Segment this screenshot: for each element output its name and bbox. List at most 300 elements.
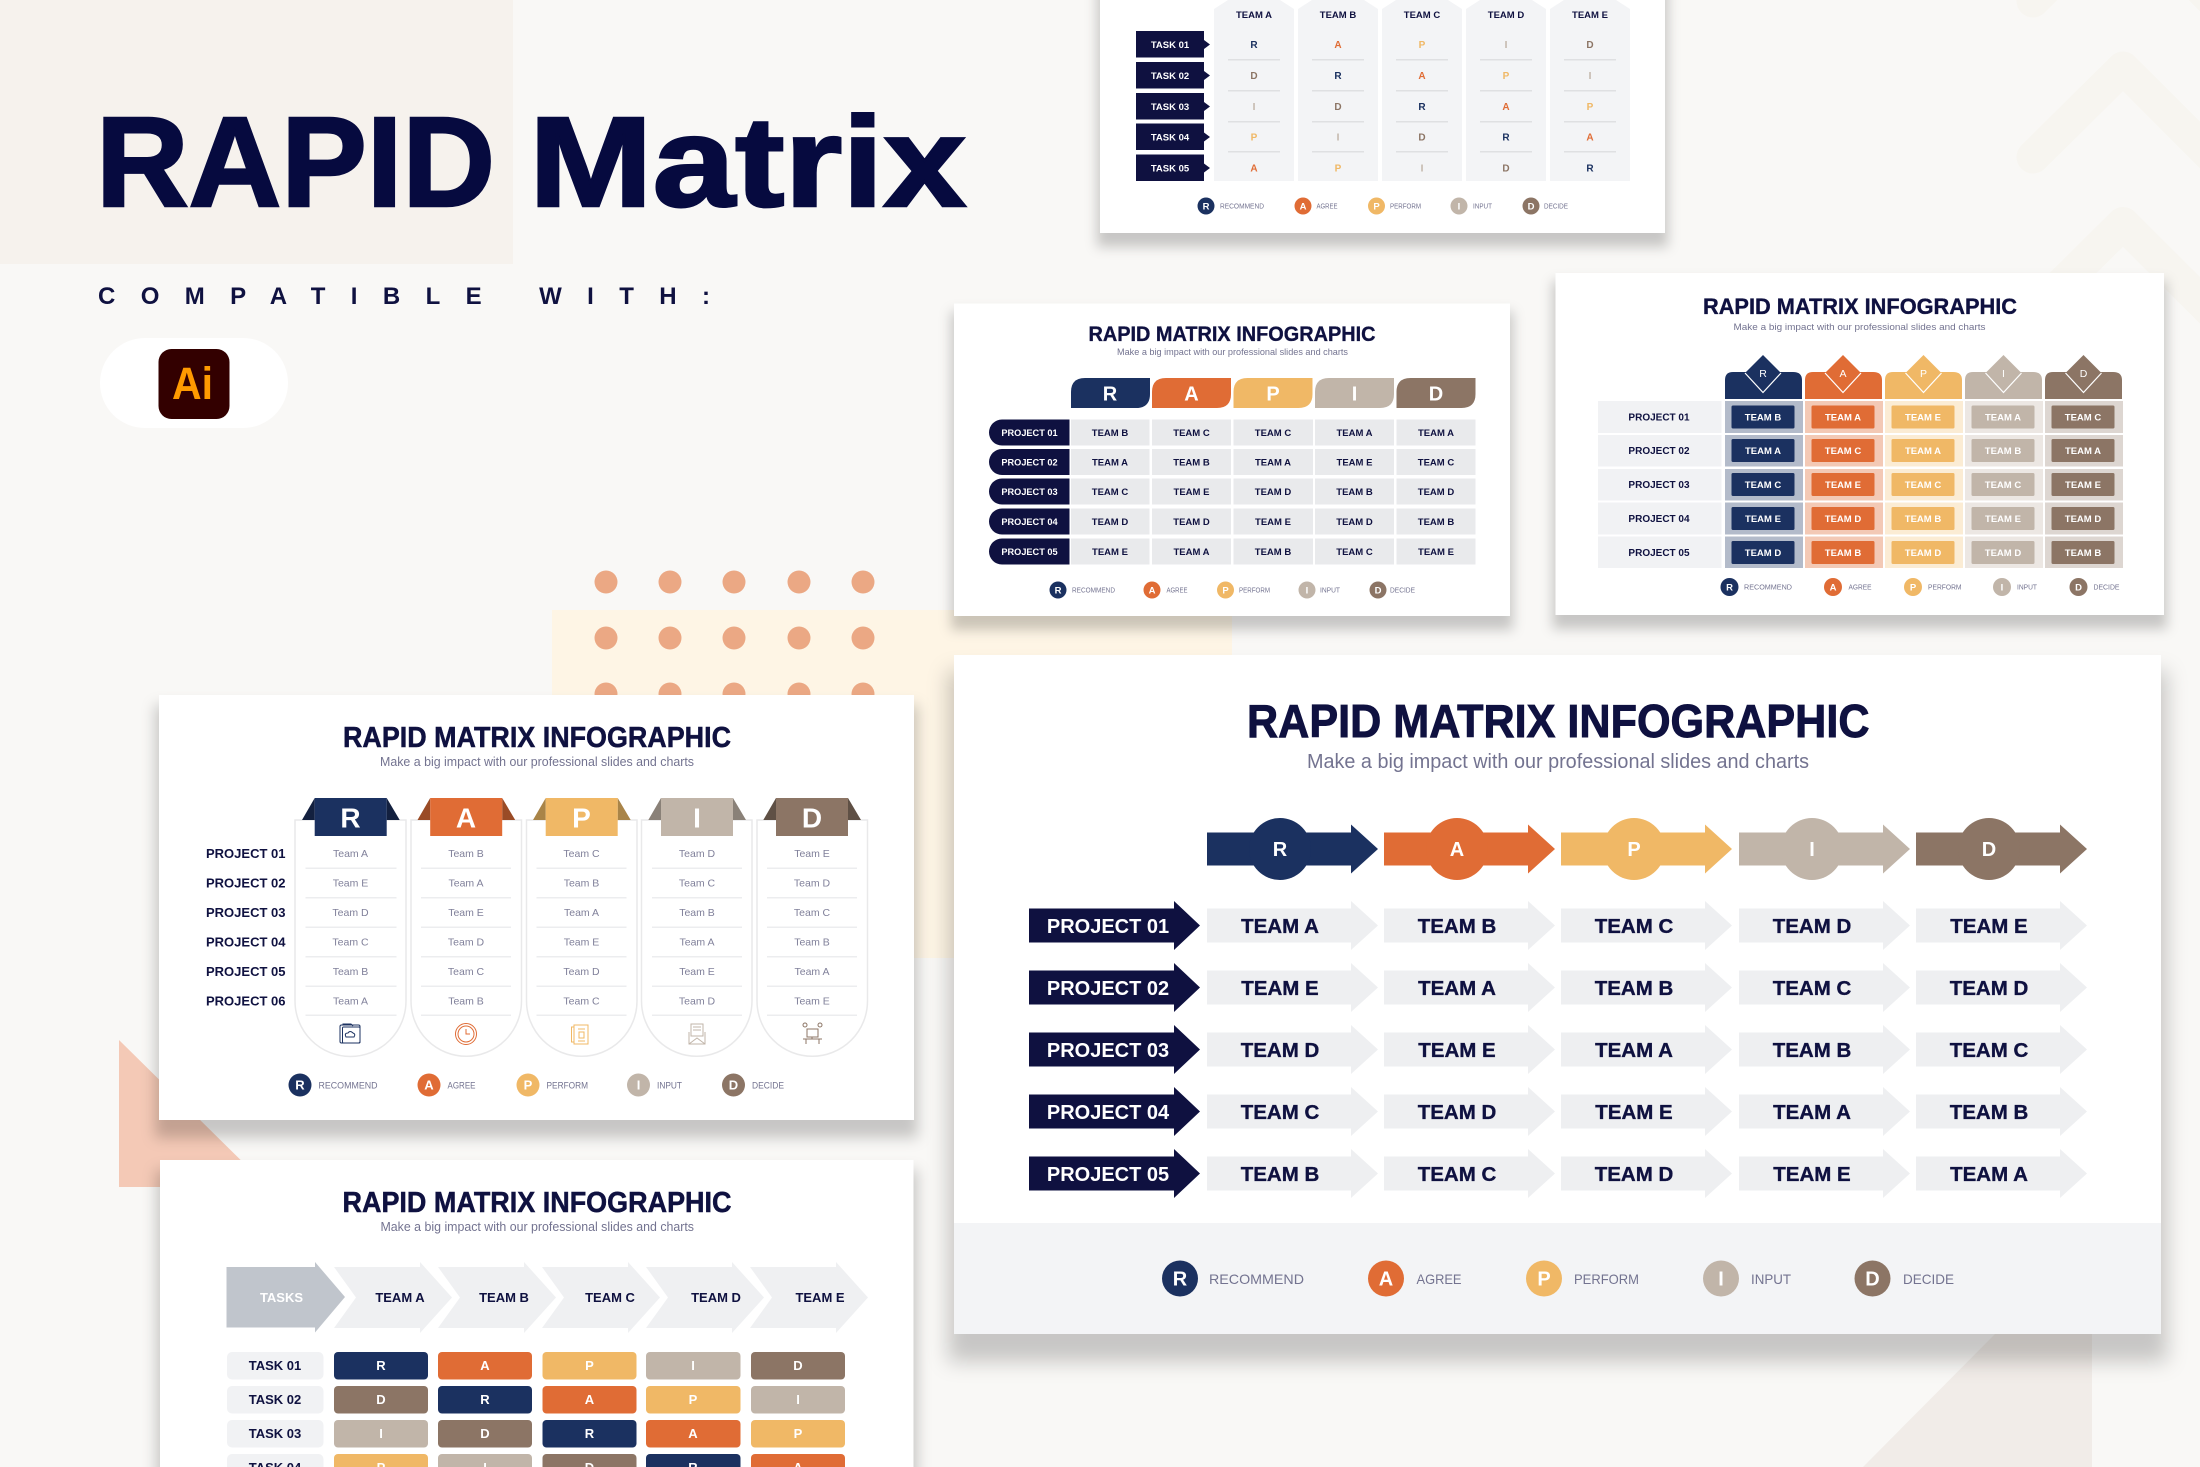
team chip labels: TEAM E	[1905, 412, 1941, 424]
team cell labels: TEAM C	[1173, 428, 1210, 439]
team names: Team B	[333, 966, 368, 978]
team arrow labels: TEAM E	[1241, 977, 1319, 1000]
task labels: TASK 02	[249, 1392, 301, 1407]
team cell labels: TEAM E	[1337, 458, 1372, 468]
team header arrows: TEAM B	[479, 1290, 529, 1305]
legend	[1162, 1260, 1954, 1296]
project labels: PROJECT 02	[206, 876, 285, 890]
legend: RECOMMEND	[1220, 204, 1264, 210]
team arrow labels: TEAM A	[1241, 915, 1319, 938]
legend	[1050, 582, 1415, 598]
legend: A	[1830, 582, 1837, 594]
project labels	[206, 846, 286, 1008]
column heads: TEAM C	[1404, 10, 1440, 21]
RAPID cell grid	[334, 1352, 845, 1467]
RAPID cell grid: A	[585, 1392, 595, 1407]
project labels: PROJECT 04	[206, 934, 286, 950]
team cell labels: TEAM B	[1336, 487, 1373, 498]
task tag labels	[1151, 40, 1190, 174]
task tag labels: TASK 02	[1151, 71, 1189, 82]
team chip labels: TEAM D	[1745, 548, 1781, 559]
diamond column headers	[1725, 355, 2122, 399]
team names: Team C	[332, 936, 369, 948]
legend: R	[1055, 586, 1062, 596]
team chip labels: TEAM C	[1985, 480, 2021, 491]
team columns	[1214, 0, 1630, 181]
legend: AGREE	[1848, 584, 1872, 592]
team cell labels: TEAM E	[1418, 547, 1454, 558]
team cell labels: TEAM A	[1336, 428, 1373, 439]
letter grid: A	[1250, 164, 1258, 174]
team cell labels: TEAM B	[1255, 547, 1291, 558]
team cell labels: TEAM A	[1173, 547, 1210, 558]
RAPID cell grid: P	[585, 1358, 594, 1373]
project labels: PROJECT 06	[206, 994, 285, 1008]
panel: arrow matrix slide	[954, 655, 2161, 1334]
RAPID arrow headers: A	[1450, 839, 1464, 861]
RAPID arrow headers: I	[1809, 839, 1815, 861]
team arrow labels: TEAM C	[1418, 1163, 1496, 1186]
team names: Team B	[564, 878, 599, 890]
diamond column headers: P	[1920, 368, 1927, 380]
team arrows	[1207, 901, 2087, 1198]
team names: Team A	[794, 966, 830, 978]
letter grid: A	[1502, 102, 1510, 113]
letter grid: P	[1251, 132, 1258, 144]
team chip labels: TEAM C	[2065, 412, 2101, 424]
legend: RECOMMEND	[318, 1080, 378, 1090]
column heads: TEAM D	[1488, 10, 1524, 21]
letter grid: D	[1250, 71, 1258, 82]
team names: Team E	[794, 848, 830, 860]
project arrow labels: PROJECT 04	[1047, 1102, 1170, 1124]
team chip labels: TEAM C	[1825, 446, 1861, 457]
tasks header arrow: TASKS	[260, 1290, 303, 1305]
legend: R	[295, 1078, 305, 1092]
project labels: PROJECT 01	[206, 846, 285, 861]
project row labels: PROJECT 05	[1628, 548, 1690, 559]
team chip labels: TEAM B	[1905, 514, 1941, 525]
legend: DECIDE	[1390, 588, 1415, 594]
project arrow labels: PROJECT 01	[1047, 916, 1169, 938]
team names: Team B	[448, 996, 484, 1008]
team arrow labels: TEAM E	[1950, 915, 2028, 938]
task tag labels: TASK 01	[1151, 40, 1190, 51]
slide subtitle: Make a big impact with our professional slides and charts	[1117, 347, 1348, 358]
team chip labels: TEAM D	[2065, 514, 2101, 525]
team cells	[1071, 420, 1476, 564]
team chip labels: TEAM A	[1825, 412, 1861, 424]
panel: capsule columns slide	[159, 695, 914, 1120]
legend: P	[1373, 202, 1380, 212]
team cell labels	[1092, 428, 1454, 558]
icon: Adobe Illustrator badge: Ai	[172, 358, 213, 409]
team names: Team A	[448, 878, 484, 890]
legend	[1198, 198, 1568, 214]
team cell labels: TEAM C	[1336, 547, 1373, 558]
RAPID leaf headers: I	[1352, 384, 1357, 406]
project pill labels: PROJECT 01	[1001, 428, 1058, 438]
background corner shape bottom right	[1863, 1300, 2092, 1467]
task tag labels: TASK 05	[1151, 164, 1190, 174]
legend: I	[2001, 582, 2003, 594]
team names: Team E	[794, 996, 830, 1008]
team cell labels: TEAM E	[1092, 547, 1128, 558]
background peach shape	[119, 1040, 268, 1187]
project arrow labels: PROJECT 02	[1047, 978, 1169, 1000]
team header arrows: TEAM C	[585, 1290, 636, 1305]
project row labels: PROJECT 03	[1628, 480, 1690, 491]
RAPID cell grid: I	[796, 1392, 800, 1407]
row dividers	[1228, 59, 1616, 152]
folded header tabs: R	[340, 802, 361, 834]
team chip labels	[1745, 412, 2101, 559]
project labels: PROJECT 03	[206, 905, 285, 920]
icon: desk	[803, 1023, 822, 1044]
RAPID leaf headers: D	[1429, 384, 1443, 406]
team cell labels: TEAM B	[1173, 458, 1210, 468]
team names: Team A	[564, 907, 599, 919]
RAPID cell grid: I	[691, 1358, 695, 1373]
legend: I	[1458, 202, 1460, 212]
team arrow labels: TEAM B	[1950, 1101, 2028, 1124]
team chip labels: TEAM A	[2065, 446, 2101, 457]
team names: Team C	[563, 996, 600, 1008]
team cell labels: TEAM D	[1092, 517, 1128, 528]
team chip labels: TEAM E	[1985, 514, 2021, 525]
team arrow labels: TEAM C	[1595, 915, 1673, 938]
team cell labels: TEAM A	[1092, 458, 1128, 468]
legend: AGREE	[1316, 204, 1338, 210]
legend: A	[1300, 202, 1307, 212]
legend: RECOMMEND	[1072, 588, 1115, 594]
RAPID cell grid: A	[688, 1426, 698, 1441]
slide title: RAPID MATRIX INFOGRAPHIC	[342, 1187, 732, 1219]
letter grid: I	[1589, 71, 1592, 82]
folded header tabs	[302, 798, 861, 836]
slide title: RAPID MATRIX INFOGRAPHIC	[1247, 695, 1870, 747]
diamond column headers: D	[2080, 368, 2088, 380]
legend: D	[1528, 202, 1535, 212]
folded header tabs: A	[456, 802, 476, 834]
letter grid: D	[1586, 40, 1594, 51]
letter grid: R	[1334, 71, 1342, 82]
team cell labels: TEAM E	[1255, 517, 1291, 528]
legend	[288, 1074, 784, 1096]
legend: P	[1910, 582, 1917, 594]
team chip labels: TEAM C	[1745, 480, 1781, 491]
team arrow labels: TEAM D	[1950, 977, 2028, 1000]
letter grid: D	[1418, 132, 1426, 144]
RAPID arrow headers: D	[1982, 839, 1996, 861]
letter grid: P	[1335, 164, 1342, 174]
team arrow labels: TEAM D	[1595, 1163, 1673, 1186]
letter grid: I	[1337, 132, 1340, 144]
RAPID cell grid: P	[794, 1426, 803, 1441]
team names: Team B	[679, 907, 715, 919]
team names: Team B	[794, 936, 830, 948]
slide subtitle: Make a big impact with our professional slides and charts	[380, 754, 694, 769]
team arrow labels: TEAM A	[1418, 977, 1496, 1000]
team names: Team E	[564, 936, 599, 948]
team header arrows: TEAM A	[375, 1290, 425, 1305]
team chip labels: TEAM D	[1825, 514, 1861, 525]
letter grid: I	[1505, 40, 1508, 51]
team names: Team C	[563, 848, 600, 860]
icon: cloud folder	[340, 1024, 360, 1043]
panel: task block matrix slide	[160, 1160, 914, 1467]
project arrow labels: PROJECT 05	[1047, 1164, 1169, 1186]
legend: PERFORM	[1574, 1271, 1639, 1287]
team arrow labels: TEAM C	[1241, 1101, 1319, 1124]
compatible with heading: COMPATIBLE WITH:	[98, 283, 710, 310]
task tag labels: TASK 04	[1151, 132, 1190, 144]
icon: document	[572, 1025, 588, 1044]
team cell labels: TEAM B	[1418, 517, 1454, 528]
team arrow labels: TEAM B	[1418, 915, 1496, 938]
team arrow labels: TEAM C	[1773, 977, 1851, 1000]
column heads: TEAM A	[1236, 10, 1272, 21]
team arrow labels: TEAM D	[1241, 1039, 1319, 1062]
letter grid: D	[1502, 164, 1510, 174]
legend: INPUT	[1751, 1271, 1791, 1287]
legend: PERFORM	[1928, 584, 1962, 592]
RAPID cell grid: P	[689, 1392, 698, 1407]
RAPID cell grid: D	[480, 1426, 490, 1441]
RAPID cell grid: D	[376, 1392, 386, 1407]
diamond column headers: R	[1759, 368, 1767, 380]
team chip labels: TEAM D	[1985, 548, 2021, 559]
project pill labels: PROJECT 05	[1001, 547, 1058, 557]
letter grid: R	[1586, 164, 1594, 174]
project arrow labels: PROJECT 03	[1047, 1040, 1169, 1062]
team cell labels: TEAM A	[1255, 458, 1291, 468]
icon: clock	[456, 1024, 476, 1044]
letter grid: R	[1250, 40, 1258, 51]
task tags	[1136, 31, 1210, 181]
team chip labels: TEAM A	[1905, 446, 1941, 457]
column heads: TEAM E	[1572, 10, 1608, 21]
RAPID arrow headers: P	[1627, 839, 1641, 861]
team arrow labels: TEAM D	[1773, 915, 1851, 938]
team names: Team D	[332, 907, 369, 919]
team names	[332, 848, 830, 1008]
legend: A	[1379, 1268, 1393, 1290]
team chip labels: TEAM B	[2065, 548, 2101, 559]
team cell labels: TEAM C	[1092, 487, 1128, 498]
icon: envelope	[689, 1024, 705, 1044]
legend: P	[1537, 1268, 1551, 1290]
main title	[96, 91, 966, 234]
project pill labels	[1001, 428, 1058, 557]
team chip labels: TEAM B	[1745, 412, 1781, 424]
team names: Team C	[448, 966, 484, 978]
team arrow labels: TEAM C	[1950, 1039, 2028, 1062]
slide subtitle: Make a big impact with our professional slides and charts	[1734, 322, 1986, 333]
team header arrows: TEAM D	[691, 1290, 741, 1305]
row dividers	[306, 868, 857, 1016]
team names: Team E	[679, 966, 715, 978]
letter grid: A	[1334, 40, 1342, 51]
background block top left	[0, 0, 513, 264]
capsule outlines	[295, 820, 868, 1056]
team names: Team D	[679, 848, 715, 860]
RAPID cell grid: R	[480, 1392, 490, 1407]
team names: Team E	[448, 907, 484, 919]
legend: DECIDE	[1903, 1271, 1954, 1287]
team chips	[1732, 406, 2114, 564]
team header arrows: TEAM E	[795, 1290, 845, 1305]
folded header tabs: I	[693, 802, 701, 834]
letter grid: A	[1586, 132, 1594, 144]
RAPID arrow headers	[1207, 818, 2087, 880]
team names: Team D	[794, 878, 830, 890]
team chip labels: TEAM E	[1825, 480, 1861, 491]
legend	[1720, 578, 2120, 596]
team names: Team A	[679, 936, 715, 948]
project row labels: PROJECT 04	[1628, 514, 1690, 525]
RAPID cell grid: D	[793, 1358, 803, 1373]
task labels: TASK 03	[249, 1426, 301, 1441]
letter grid: I	[1421, 164, 1424, 174]
team chip labels: TEAM D	[1905, 548, 1941, 559]
letter grid: R	[1502, 132, 1510, 144]
team names: Team A	[333, 996, 368, 1008]
panel: diamond header table slide	[1556, 273, 2164, 615]
tasks header arrow	[226, 1262, 345, 1332]
team arrow labels: TEAM A	[1595, 1039, 1673, 1062]
legend: R	[1726, 582, 1733, 594]
project labels: PROJECT 05	[206, 964, 285, 979]
legend: I	[1718, 1268, 1724, 1290]
letter grid: P	[1503, 71, 1510, 82]
team cell labels: TEAM D	[1173, 517, 1210, 528]
team arrow labels: TEAM B	[1595, 977, 1673, 1000]
team cell labels: TEAM D	[1336, 517, 1373, 528]
task labels: TASK 01	[249, 1358, 301, 1373]
slide title: RAPID MATRIX INFOGRAPHIC	[343, 722, 731, 754]
team cell labels: TEAM C	[1418, 458, 1454, 468]
team arrow labels: TEAM B	[1773, 1039, 1851, 1062]
project row labels: PROJECT 02	[1628, 446, 1690, 457]
letter grid: A	[1418, 71, 1426, 82]
team names: Team E	[333, 878, 368, 890]
legend: R	[1173, 1268, 1188, 1290]
team cell labels: TEAM D	[1255, 487, 1291, 498]
RAPID cell grid: R	[376, 1358, 386, 1373]
project arrow labels	[1047, 916, 1170, 1186]
project pills	[989, 420, 1070, 564]
legend: AGREE	[1166, 588, 1188, 594]
legend: I	[1306, 586, 1308, 596]
legend: PERFORM	[1239, 588, 1270, 594]
legend: INPUT	[2017, 584, 2038, 592]
team chip labels: TEAM B	[1825, 548, 1861, 559]
RAPID arrow headers: R	[1273, 839, 1288, 861]
legend: AGREE	[448, 1080, 476, 1090]
legend: R	[1203, 202, 1210, 212]
tinted column backgrounds	[1725, 401, 2123, 568]
legend: PERFORM	[1390, 204, 1421, 210]
team cell labels: TEAM E	[1174, 487, 1209, 498]
project arrows	[1029, 901, 1200, 1198]
legend: INPUT	[1320, 588, 1341, 594]
diamond column headers: A	[1839, 368, 1847, 380]
team cell labels: TEAM D	[1418, 487, 1454, 498]
team names: Team D	[448, 936, 484, 948]
task labels	[227, 1352, 324, 1467]
slide title: RAPID MATRIX INFOGRAPHIC	[1088, 322, 1376, 346]
column heads	[1236, 10, 1608, 21]
icon: Adobe Illustrator badge	[100, 338, 288, 428]
panel: leaf header table slide	[954, 304, 1510, 616]
letter grid: P	[1587, 102, 1594, 113]
background cream block	[552, 610, 1232, 958]
project pill labels: PROJECT 04	[1001, 517, 1058, 527]
legend: P	[1222, 586, 1229, 596]
panel: task letter matrix slide	[1100, 0, 1665, 233]
RAPID leaf headers: A	[1184, 384, 1199, 406]
project row labels	[1598, 401, 1722, 568]
team arrow labels: TEAM A	[1773, 1101, 1851, 1124]
legend: RECOMMEND	[1744, 584, 1792, 592]
legend: AGREE	[1416, 1271, 1462, 1287]
team chip labels: TEAM A	[1985, 412, 2021, 424]
legend: RECOMMEND	[1209, 1271, 1304, 1287]
project row labels: PROJECT 01	[1628, 412, 1690, 424]
RAPID leaf headers: R	[1103, 384, 1118, 406]
slide subtitle: Make a big impact with our professional slides and charts	[1307, 751, 1809, 773]
legend: P	[524, 1078, 533, 1092]
team arrow labels: TEAM D	[1418, 1101, 1496, 1124]
background chevrons	[1960, 0, 2200, 400]
team names: Team D	[563, 966, 600, 978]
RAPID cell grid: A	[480, 1358, 490, 1373]
letter grid: R	[1418, 102, 1426, 113]
column heads: TEAM B	[1320, 10, 1356, 21]
main title: RAPID	[96, 91, 495, 234]
team names: Team D	[679, 996, 715, 1008]
team arrow labels: TEAM A	[1950, 1163, 2028, 1186]
RAPID cell grid: I	[379, 1426, 383, 1441]
task tag labels: TASK 03	[1151, 102, 1189, 113]
letter grid: D	[1334, 102, 1342, 113]
legend: DECIDE	[2094, 584, 2120, 592]
project pill labels: PROJECT 02	[1001, 458, 1058, 468]
legend: INPUT	[1473, 204, 1493, 210]
team names: Team B	[448, 848, 484, 860]
team chip labels: TEAM E	[1745, 514, 1781, 525]
RAPID leaf headers	[1071, 378, 1476, 408]
folded header tabs: D	[802, 802, 822, 834]
team cell labels: TEAM A	[1418, 428, 1454, 439]
team arrow labels	[1241, 915, 2028, 1186]
team names: Team A	[333, 848, 368, 860]
project pill labels: PROJECT 03	[1001, 487, 1058, 497]
legend: PERFORM	[546, 1080, 588, 1090]
team chip labels: TEAM E	[2065, 480, 2101, 491]
RAPID leaf headers: P	[1266, 384, 1280, 406]
slide title: RAPID MATRIX INFOGRAPHIC	[1703, 294, 2017, 319]
dot grid	[594, 570, 874, 706]
letter grid: I	[1253, 102, 1256, 113]
RAPID cell grid: R	[585, 1426, 595, 1441]
slide subtitle: Make a big impact with our professional slides and charts	[380, 1219, 694, 1234]
main title: Matrix	[529, 91, 966, 234]
team arrow labels: TEAM E	[1773, 1163, 1851, 1186]
team chip labels: TEAM A	[1745, 446, 1781, 457]
team arrow labels: TEAM E	[1418, 1039, 1496, 1062]
